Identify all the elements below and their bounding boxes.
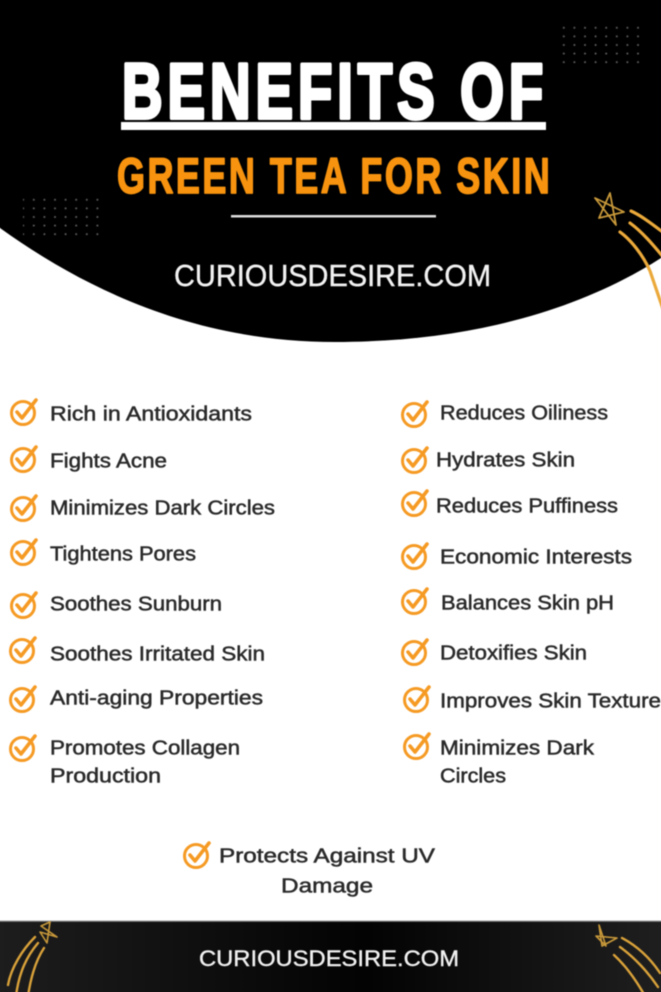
item: minimizes dark circles — [404, 734, 595, 788]
item: hydrates skin: Hydrates Skin — [436, 450, 575, 472]
item: detoxifies skin — [402, 640, 587, 665]
item: soothes irritated skin: Soothes Irritated Skin — [50, 644, 265, 666]
divider line — [231, 215, 436, 218]
item: promotes collagen production: Promotes Collagen — [50, 738, 240, 760]
item: soothes sunburn: Soothes Sunburn — [50, 594, 222, 616]
item: minimizes dark circles: Circles — [440, 766, 506, 788]
item: anti-aging properties: Anti-aging Properties — [50, 688, 263, 710]
item: rich in antioxidants — [12, 400, 252, 426]
subtitle: green tea for skin: GREEN TEA FOR SKIN — [117, 149, 550, 204]
item: minimizes dark circles: Minimizes Dark Circles — [50, 498, 275, 520]
item: protects against uv damage: Protects Against UV — [219, 846, 436, 868]
website url: CURIOUSDESIRE.COM — [174, 258, 491, 293]
item: fights acne — [12, 447, 167, 473]
item: protects against uv damage: Damage — [281, 876, 373, 898]
item: improves skin texture — [404, 687, 661, 713]
item: rich in antioxidants: Rich in Antioxidants — [50, 404, 252, 426]
item: reduces oiliness: Reduces Oiliness — [440, 403, 608, 425]
icon: shooting star top right — [595, 193, 661, 312]
item: improves skin texture: Improves Skin Texture — [440, 691, 661, 713]
item: balances skin ph — [402, 589, 614, 615]
header black curved panel — [0, 0, 661, 342]
item: tightens pores: Tightens Pores — [50, 544, 196, 566]
item: economic interests: Economic Interests — [440, 547, 632, 569]
checklist: left column — [10, 400, 275, 788]
item: hydrates skin — [402, 448, 575, 472]
icon: shooting star footer right — [596, 925, 660, 992]
item: anti-aging properties — [10, 687, 263, 712]
dot pattern left — [23, 193, 103, 238]
item: tightens pores — [12, 540, 196, 566]
item: reduces puffiness: Reduces Puffiness — [436, 496, 618, 518]
item: promotes collagen production: Production — [50, 766, 161, 788]
icon: shooting star footer left — [8, 922, 57, 992]
footer website url: CURIOUSDESIRE.COM — [199, 946, 459, 971]
item: soothes sunburn — [12, 593, 222, 618]
title: benefits of: BENEFITS OF — [122, 48, 543, 135]
item: economic interests — [402, 544, 632, 569]
item: reduces oiliness — [402, 402, 608, 426]
item: minimizes dark circles — [12, 496, 275, 520]
item: soothes irritated skin — [10, 638, 265, 666]
item: balances skin ph: Balances Skin pH — [441, 593, 614, 615]
item: protects against uv damage — [184, 843, 436, 898]
item: fights acne: Fights Acne — [50, 451, 167, 473]
item: reduces puffiness — [402, 491, 618, 518]
checklist: right column — [402, 402, 661, 788]
item: detoxifies skin: Detoxifies Skin — [440, 643, 587, 665]
dot pattern top right — [559, 22, 646, 69]
item: promotes collagen production — [10, 736, 240, 788]
item: minimizes dark circles: Minimizes Dark — [440, 738, 595, 760]
footer band — [0, 920, 661, 992]
